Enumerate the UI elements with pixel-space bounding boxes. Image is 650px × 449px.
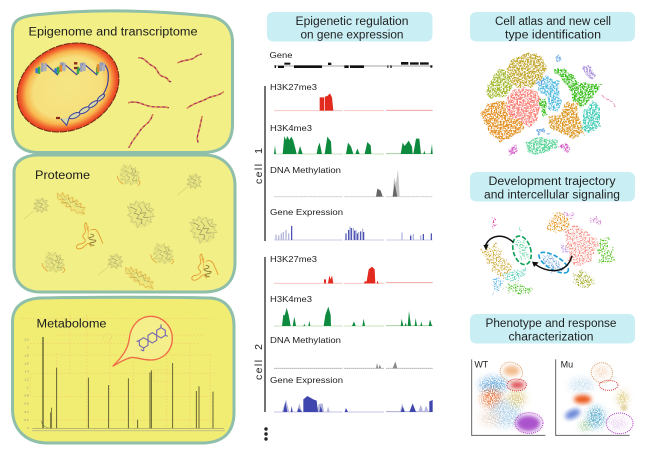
- label: cell 1: cell 1: [253, 148, 265, 184]
- gene expression track: [274, 396, 433, 412]
- chart: trajectory tSNE: [482, 212, 613, 295]
- metabolic pathway background: [20, 315, 217, 428]
- chart: WT scatter: [472, 359, 545, 435]
- heading: proteome: Proteome: [35, 170, 90, 182]
- more cells ellipsis: [264, 427, 268, 441]
- cell 1 tracks: Gene Expression: [270, 208, 343, 217]
- chart: chromatogram: 0.6: [25, 402, 29, 406]
- heading: epigenetic regulation: Epigenetic regulation: [296, 16, 408, 28]
- heading: epigenome and transcriptome: Epigenome and transcriptome: [28, 26, 198, 38]
- chart: chromatogram: 2: [27, 345, 29, 349]
- chart: Mu scatter: Mu: [561, 359, 573, 369]
- gene expression track: [274, 226, 433, 240]
- chart: chromatogram: 2.2: [25, 337, 29, 341]
- icon: molecule: [137, 324, 168, 351]
- icon: mRNA strands: [129, 54, 223, 147]
- label: cell 2: cell 2: [253, 344, 265, 380]
- arrows: [486, 236, 572, 271]
- chart: chromatogram: 0.8: [25, 394, 29, 398]
- chart: chromatogram: 1.8: [25, 353, 29, 357]
- gene track: Gene: [270, 51, 293, 60]
- cell 1 tracks: H3K27me3: [270, 83, 318, 92]
- heading: cell atlas: Cell atlas and new cell: [495, 16, 611, 28]
- chart: chromatogram: 1.4: [25, 369, 29, 373]
- chart: chromatogram: 1.2: [25, 378, 29, 382]
- heading: phenotype and response: Phenotype and response: [486, 318, 616, 330]
- chart: chromatogram: 0.2: [25, 418, 29, 422]
- chart: chromatogram: 0: [27, 426, 29, 430]
- heading: phenotype and response: characterization: [508, 332, 594, 344]
- heading: epigenetic regulation: [267, 12, 432, 42]
- panel: epigenetic regulation on gene expression: [253, 12, 433, 441]
- H3K27me3 track: [274, 267, 433, 283]
- panel: development trajectory: [470, 172, 635, 295]
- chart: chromatogram: 1.6: [25, 361, 29, 365]
- H3K27me3 track: [274, 93, 433, 111]
- H3K4me3 track: [274, 307, 433, 326]
- heading: development trajectory: Development trajectory: [488, 176, 616, 188]
- heading: metabolome: Metabolome: [36, 318, 106, 330]
- heading: phenotype and response: [470, 314, 635, 344]
- chart: tSNE cell atlas: [480, 52, 615, 155]
- trajectory ovals: [510, 234, 571, 277]
- icons: protein structures: [24, 165, 218, 290]
- panel: metabolome: [12, 297, 234, 443]
- cell 1 tracks: H3K4me3: [270, 124, 313, 133]
- panel: phenotype and response: [470, 314, 635, 435]
- heading: cell atlas: type identification: [505, 30, 601, 42]
- callout: molecule magnifier: [113, 316, 172, 366]
- cell 1 tracks: DNA Methylation: [270, 166, 341, 175]
- cell 2 tracks: H3K27me3: [270, 255, 318, 264]
- chart: Mu scatter: [556, 359, 633, 435]
- icon: cell nucleus with chromatin: [2, 26, 134, 149]
- heading: cell atlas: [470, 12, 635, 42]
- chart: chromatogram: 0.4: [25, 410, 29, 414]
- cell 1 tracks: [253, 83, 433, 241]
- H3K4me3 track: [274, 136, 433, 154]
- chart: chromatogram: [25, 337, 225, 431]
- cell 2 tracks: DNA Methylation: [270, 336, 341, 345]
- DNA methylation track: [274, 361, 433, 368]
- DNA methylation track: [274, 169, 433, 197]
- panel: epigenome and transcriptome: [2, 11, 232, 152]
- heading: development trajectory: [470, 172, 635, 202]
- heading: epigenetic regulation: on gene expression: [300, 30, 404, 42]
- panel: cell atlas: [470, 12, 635, 155]
- panel: proteome: [14, 155, 235, 292]
- chart: WT scatter: WT: [474, 359, 489, 369]
- chart: chromatogram: 1: [27, 386, 29, 390]
- heading: development trajectory: and intercellular signaling: [484, 190, 620, 202]
- cell 2 tracks: [253, 255, 433, 412]
- cell 2 tracks: H3K4me3: [270, 295, 313, 304]
- cell 2 tracks: Gene Expression: [270, 376, 343, 385]
